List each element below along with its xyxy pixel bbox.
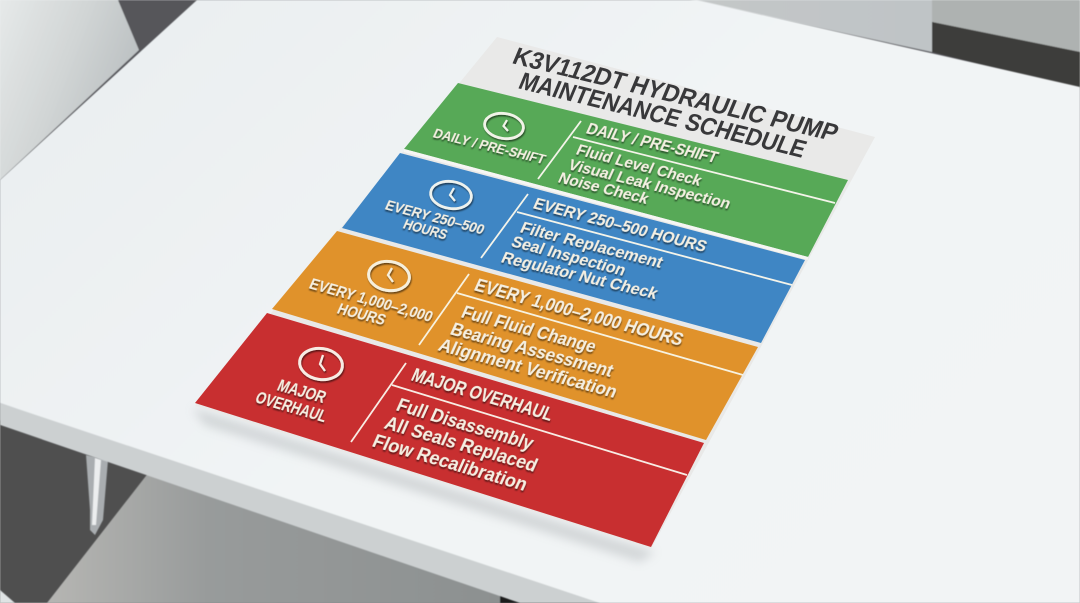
- tasks: 250-500: Seal Inspection: [508, 234, 628, 280]
- chair below table: [0, 472, 600, 603]
- label: major overhaul: OVERHAUL: [252, 388, 330, 426]
- icon: clock: [429, 179, 473, 211]
- tasks: major overhaul: Flow Recalibration: [369, 431, 531, 496]
- tasks: daily: [555, 121, 733, 213]
- panel: every 1,000-2,000 hours: [272, 231, 758, 440]
- divider lines: [419, 274, 743, 375]
- poster base: [195, 37, 875, 549]
- label: major overhaul: MAJOR: [274, 376, 329, 407]
- orange band: [272, 231, 758, 440]
- panel: every 250-500 hours: [342, 153, 805, 343]
- tasks: 250-500: Filter Replacement: [517, 220, 666, 272]
- label: 1,000-2,000: EVERY 1,000–2,000: [306, 276, 435, 326]
- tasks: daily: Visual Leak Inspection: [565, 157, 733, 213]
- title: K3V112DT HYDRAULIC PUMP: [509, 43, 842, 147]
- tasks: 250-500: EVERY 250–500 HOURS: [530, 195, 710, 256]
- poster: maintenance schedule: [195, 37, 875, 549]
- icon: clock: [483, 111, 525, 141]
- tasks: 1,000-2,000: Bearing Assessment: [447, 319, 617, 381]
- divider lines: [481, 194, 792, 285]
- panel: major overhaul: [195, 150, 808, 547]
- panel: daily / pre-shift: [404, 83, 848, 257]
- divider lines: [538, 121, 835, 203]
- icon: clock: [367, 259, 411, 293]
- tasks: major overhaul: [369, 365, 557, 496]
- label: 1,000-2,000: HOURS: [334, 302, 388, 329]
- label: daily: DAILY / PRE-SHIFT: [431, 125, 549, 167]
- tasks: daily: Fluid Level Check: [573, 142, 705, 190]
- red band: [195, 313, 704, 547]
- tasks: daily: DAILY / PRE-SHIFT: [583, 121, 721, 167]
- poster shadow: [192, 408, 655, 562]
- icon: clock: [298, 346, 344, 382]
- label: 250-500: EVERY 250–500: [382, 198, 487, 238]
- tasks: major overhaul: All Seals Replaced: [381, 413, 541, 477]
- tasks: 1,000-2,000: Alignment Verification: [435, 335, 621, 402]
- label: 250-500: HOURS: [400, 217, 450, 243]
- tasks: daily: Noise Check: [555, 170, 652, 208]
- title: MAINTENANCE SCHEDULE: [515, 68, 810, 163]
- tasks: 250-500: [498, 195, 710, 303]
- tasks: major overhaul: MAJOR OVERHAUL: [408, 365, 557, 426]
- tasks: 1,000-2,000: [435, 275, 687, 402]
- table leg: [86, 455, 108, 535]
- white gaps between bands and poster edge: [404, 150, 808, 258]
- tasks: 1,000-2,000: EVERY 1,000–2,000 HOURS: [471, 275, 687, 350]
- divider lines: [351, 363, 687, 475]
- green band: [404, 83, 848, 257]
- label: major overhaul: [252, 376, 330, 426]
- tasks: 1,000-2,000: Full Fluid Change: [458, 302, 600, 357]
- blue band: [342, 153, 805, 343]
- tasks: 250-500: Regulator Nut Check: [498, 250, 661, 303]
- tasks: major overhaul: Full Disassembly: [393, 395, 537, 455]
